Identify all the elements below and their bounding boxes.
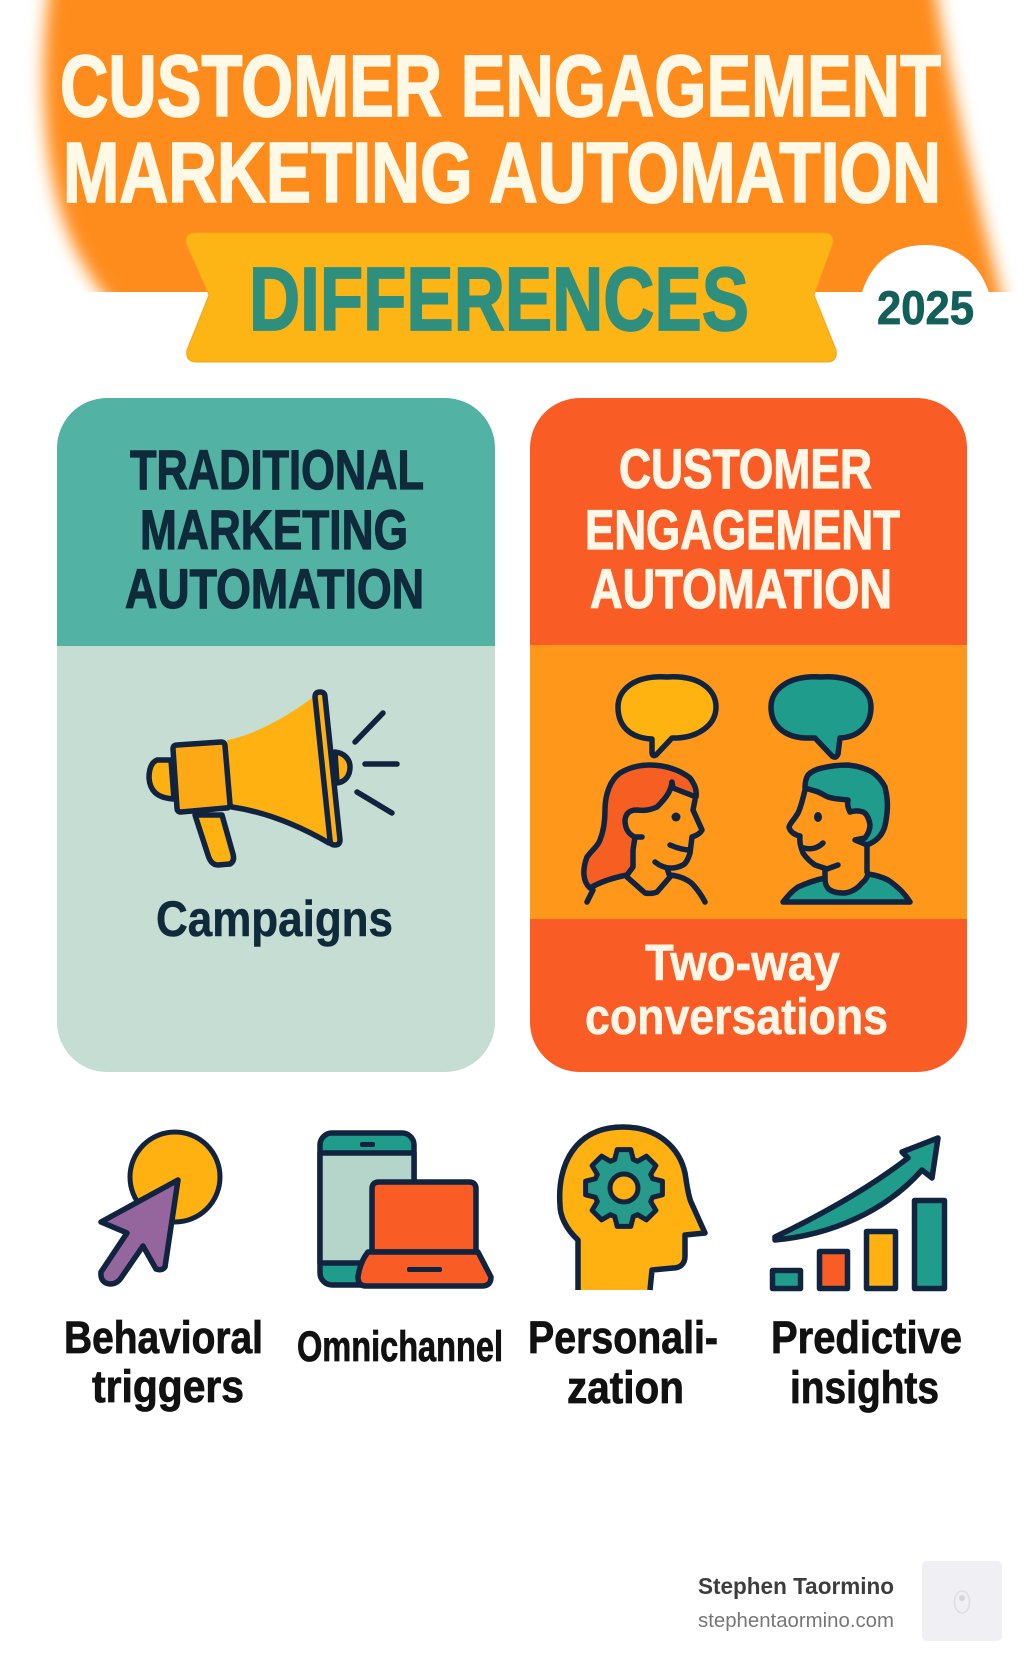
year badge: [861, 245, 990, 334]
ribbon: differences: [186, 233, 836, 362]
icon: growth bar chart: [772, 1138, 944, 1288]
label: two-way conversations: Two-way: [645, 934, 841, 991]
heading: customer engagement automation: CUSTOMER: [619, 437, 872, 500]
icon: cursor click: [101, 1132, 220, 1284]
logo placeholder: [922, 1561, 1002, 1641]
year badge: 2025: [877, 281, 974, 334]
heading: traditional marketing automation: MARKETING: [140, 498, 408, 561]
label: personalization: Personali-: [528, 1312, 718, 1363]
footer credit: stephentaormino.com: [698, 1610, 894, 1632]
icon: speech bubble left: [618, 677, 716, 756]
heading: traditional marketing automation: TRADITIONAL: [130, 438, 424, 501]
header band: [44, 0, 1008, 320]
label: personalization: [528, 1312, 718, 1413]
icon: phone and laptop: [320, 1133, 491, 1286]
icon: megaphone: [149, 692, 397, 865]
label: two-way conversations: [585, 934, 888, 1045]
label: behavioral triggers: triggers: [92, 1361, 244, 1412]
label: predictive insights: [771, 1312, 962, 1413]
feature: omnichannel: [297, 1133, 503, 1371]
icon: woman: [584, 765, 705, 902]
label: two-way conversations: conversations: [585, 988, 888, 1045]
label: predictive insights: insights: [790, 1362, 939, 1413]
label: personalization: zation: [567, 1362, 684, 1413]
feature: behavioral triggers: [64, 1132, 263, 1412]
feature: personalization: [528, 1127, 718, 1413]
ribbon: differences: DIFFERENCES: [249, 250, 749, 350]
heading: traditional marketing automation: AUTOMATION: [125, 557, 424, 620]
panel: traditional marketing automation: [57, 398, 495, 1072]
icon: man: [783, 765, 910, 902]
footer credit: Stephen Taormino: [698, 1573, 894, 1599]
icon: speech bubble right: [771, 677, 871, 757]
heading: traditional marketing automation: [125, 438, 424, 620]
label: omnichannel: Omnichannel: [297, 1323, 503, 1371]
label: behavioral triggers: Behavioral: [64, 1312, 263, 1363]
feature: predictive insights: [771, 1138, 962, 1413]
heading: customer engagement automation: [585, 437, 900, 620]
label: predictive insights: Predictive: [771, 1312, 962, 1363]
title: [60, 38, 941, 221]
label: behavioral triggers: [64, 1312, 263, 1412]
panel: customer engagement automation: [530, 398, 967, 1072]
label: campaigns: Campaigns: [156, 891, 393, 947]
heading: customer engagement automation: ENGAGEMENT: [585, 498, 900, 561]
heading: customer engagement automation: AUTOMATION: [590, 557, 892, 620]
footer credit: [698, 1573, 894, 1632]
icon: head with gear: [560, 1127, 705, 1290]
